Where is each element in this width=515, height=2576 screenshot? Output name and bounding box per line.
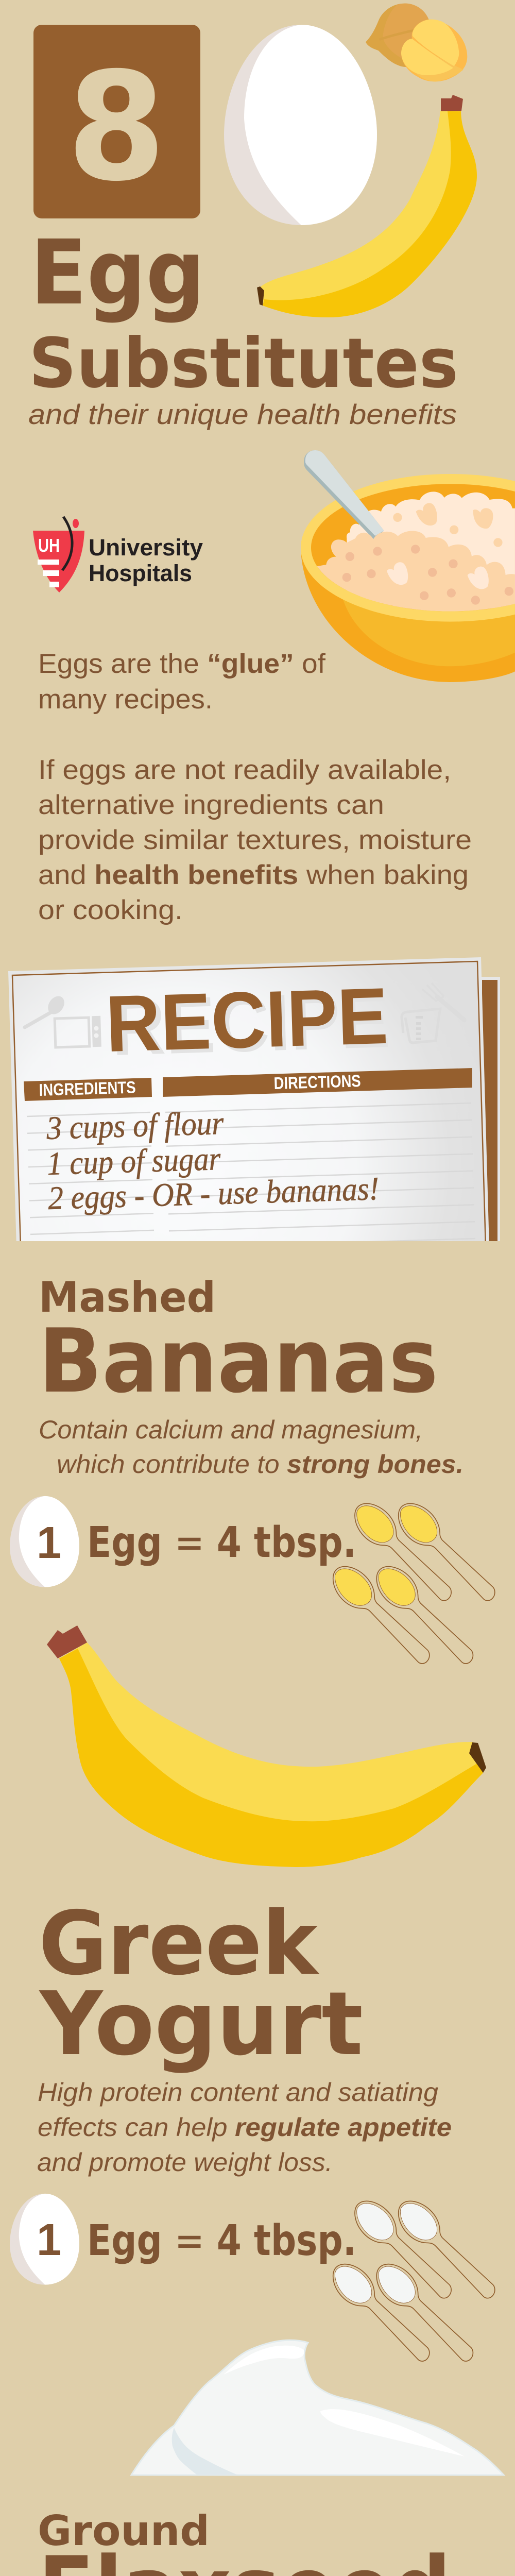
- icon: small egg with 1 (bananas): [10, 1496, 79, 1587]
- logo: University Hospitals: [33, 517, 203, 592]
- text: banana benefits: which contribute to strong bones.: [57, 1450, 464, 1479]
- directions header: [163, 1068, 472, 1097]
- recipe card: [8, 957, 500, 1248]
- logo: University Hospitals: Hospitals: [89, 560, 192, 586]
- number badge: 8: 8: [67, 41, 166, 214]
- heading: Greek Yogurt: Yogurt: [39, 1973, 363, 2075]
- text: banana benefits: [39, 1415, 464, 1479]
- handwritten ingredient list: [45, 1105, 380, 1216]
- heading: Greek Yogurt: Greek: [39, 1893, 320, 1995]
- icon: large egg: [224, 25, 377, 225]
- intro text: or cooking.: [38, 895, 183, 925]
- directions header: DIRECTIONS: [273, 1071, 361, 1093]
- heading: Greek Yogurt: [39, 1893, 363, 2075]
- text: 1 egg = 4 tbsp (bananas): Egg = 4 tbsp.: [87, 1518, 356, 1567]
- heading: Ground Flaxseed: [38, 2507, 451, 2576]
- recipe heading: RECIPE: [105, 971, 389, 1069]
- text: yogurt benefits: and promote weight loss.: [37, 2148, 333, 2177]
- intro text: alternative ingredients can: [38, 790, 384, 820]
- text: banana benefits: Contain calcium and magnesium,: [39, 1415, 423, 1444]
- handwritten ingredient list: 1 cup of sugar: [46, 1140, 221, 1182]
- intro text: Eggs are the “glue” of: [38, 649, 325, 679]
- intro text: provide similar textures, moisture: [38, 825, 472, 855]
- icon: four white spoons: [333, 2201, 495, 2361]
- icon: small egg with 1 (bananas): 1: [37, 1518, 61, 1568]
- icon: large banana: [47, 1625, 486, 1867]
- icon: small egg with 1 (yogurt): 1: [37, 2215, 61, 2265]
- logo: University Hospitals: UH: [38, 535, 60, 556]
- logo: University Hospitals: University: [89, 534, 203, 561]
- ingredients header: INGREDIENTS: [39, 1077, 136, 1099]
- recipe heading: RECIPE: [110, 975, 391, 1072]
- title: Substitutes: Substitutes: [29, 324, 458, 403]
- number badge: 8: [33, 25, 200, 218]
- intro text: If eggs are not readily available,: [38, 755, 451, 785]
- icon: small egg with 1 (yogurt): [10, 2194, 79, 2285]
- intro text: [38, 649, 472, 925]
- recipe heading: [110, 988, 386, 1055]
- heading: Mashed Bananas: Bananas: [39, 1310, 438, 1413]
- icon: chickpeas: [366, 4, 467, 81]
- subtitle: and their unique health benefits: [28, 398, 457, 430]
- heading: Ground Flaxseed: Ground: [38, 2507, 210, 2555]
- handwritten ingredient list: 3 cups of flour: [45, 1105, 225, 1146]
- text: 1 egg = 4 tbsp (yogurt): Egg = 4 tbsp.: [87, 2216, 356, 2265]
- text: yogurt benefits: effects can help regulate appetite: [38, 2113, 452, 2142]
- heading: Mashed Bananas: Mashed: [39, 1274, 216, 1322]
- icon: yogurt dollop: [131, 2340, 504, 2475]
- icon: banana (top): [257, 95, 477, 317]
- intro text: many recipes.: [38, 684, 213, 715]
- handwritten ingredient list: 2 eggs - OR - use bananas!: [47, 1170, 380, 1216]
- text: yogurt benefits: High protein content and satiating: [38, 2078, 438, 2107]
- icon: four yellow spoons: [333, 1503, 495, 1664]
- recipe faint icons: [23, 996, 423, 1049]
- intro text: and health benefits when baking: [38, 860, 469, 890]
- text: yogurt benefits: [37, 2078, 452, 2177]
- title: Egg: Egg: [30, 221, 205, 325]
- icon: oatmeal bowl with spoon: [301, 450, 515, 682]
